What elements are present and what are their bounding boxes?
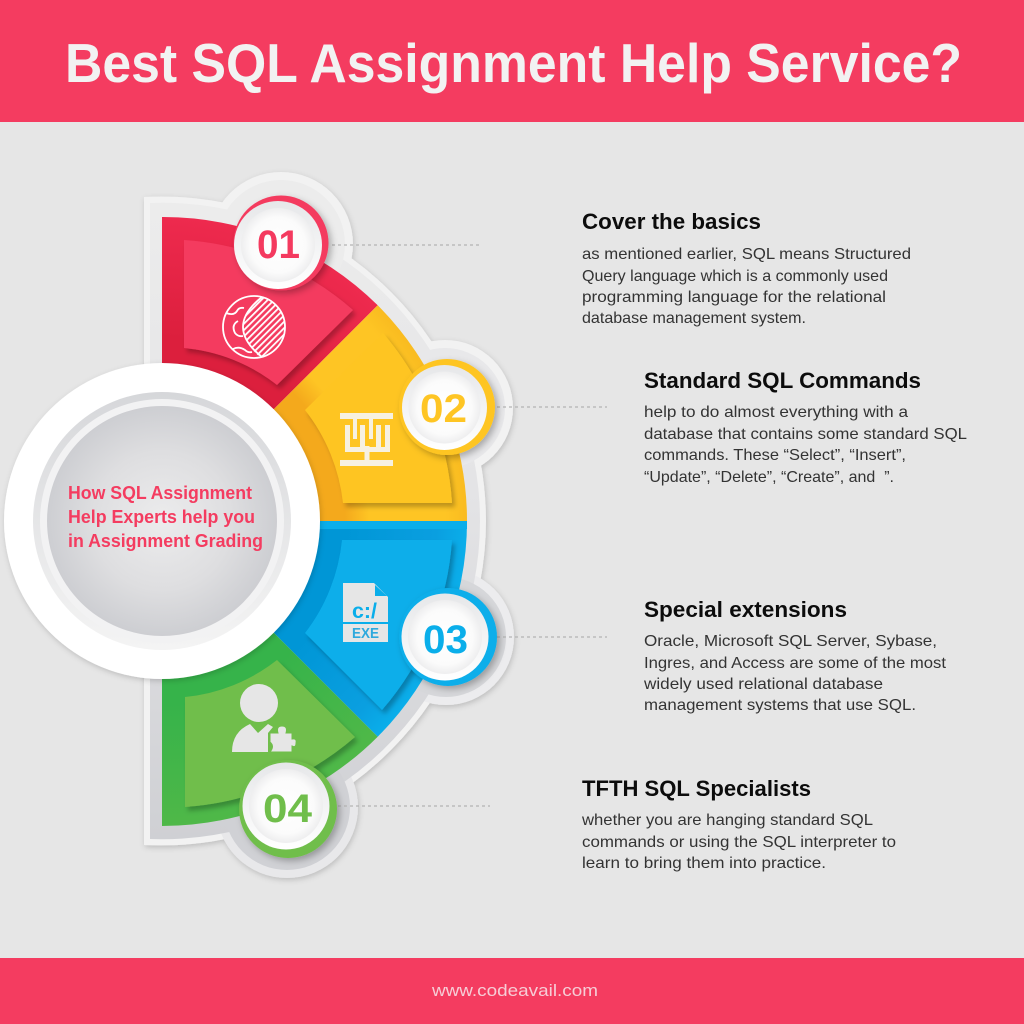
text block 03 <box>643 597 947 714</box>
text block 02: “Update”, “Delete”, “Create”, and ”. <box>644 469 894 486</box>
text block 04 <box>581 776 896 872</box>
badge 02 <box>399 359 495 455</box>
text block 01: Cover the basics <box>582 209 761 234</box>
text block 03: widely used relational database <box>643 676 883 693</box>
badge 01 <box>234 196 328 290</box>
text block 03: Ingres, and Access are some of the most <box>644 655 947 672</box>
panel 02 <box>305 333 452 503</box>
badge 04 <box>239 760 337 858</box>
panel 04 <box>185 660 355 807</box>
text block 02 <box>644 368 967 486</box>
segment 01: red <box>162 217 378 521</box>
segment 03: blue <box>162 521 467 737</box>
segment 04: green <box>162 521 378 826</box>
badge 02: 02 <box>420 387 467 431</box>
segment 02: yellow <box>162 305 467 521</box>
text block 04: commands or using the SQL interpreter to <box>582 834 896 851</box>
text block 04: whether you are hanging standard SQL <box>581 812 873 829</box>
badge 04: 04 <box>263 787 313 831</box>
footer url: www.codeavail.com <box>431 981 598 1000</box>
central text: in Assignment Grading <box>68 531 263 551</box>
central text: How SQL Assignment <box>68 483 252 503</box>
central circle <box>4 363 320 679</box>
central text <box>68 483 263 551</box>
badge 01: 01 <box>257 223 300 267</box>
central text: Help Experts help you <box>68 507 255 527</box>
icon: table structure <box>340 413 393 466</box>
text block 04: learn to bring them into practice. <box>582 855 826 872</box>
text block 01: Query language which is a commonly used <box>582 268 888 285</box>
icon: exe file: c:/ <box>352 600 377 623</box>
badge 03: 03 <box>423 618 468 662</box>
icon: exe file: EXE <box>352 625 379 642</box>
header band <box>0 0 1024 122</box>
badge 03 <box>399 588 497 686</box>
title: Best SQL Assignment Help Service? <box>65 32 962 94</box>
text block 04: TFTH SQL Specialists <box>582 776 811 801</box>
icon: exe file <box>343 583 388 642</box>
text block 03: management systems that use SQL. <box>644 697 916 714</box>
text block 02: database that contains some standard SQL <box>644 426 967 443</box>
text block 01: as mentioned earlier, SQL means Structured <box>582 246 911 263</box>
icon: globe <box>223 295 290 359</box>
text block 01: programming language for the relational <box>582 289 886 306</box>
text block 01: database management system. <box>582 310 806 327</box>
icon: person with puzzle piece <box>232 684 296 752</box>
text block 01 <box>582 209 911 327</box>
panel 03 <box>305 540 452 710</box>
text block 02: commands. These “Select”, “Insert”, <box>644 447 906 464</box>
text block 02: Standard SQL Commands <box>644 368 921 393</box>
text block 02: help to do almost everything with a <box>644 404 908 421</box>
footer band <box>0 958 1024 1024</box>
text block 03: Special extensions <box>644 597 847 622</box>
connector lines <box>332 245 607 806</box>
text block 03: Oracle, Microsoft SQL Server, Sybase, <box>644 633 937 650</box>
panel 01 <box>184 240 353 385</box>
outer frame behind semicircle <box>144 172 514 878</box>
